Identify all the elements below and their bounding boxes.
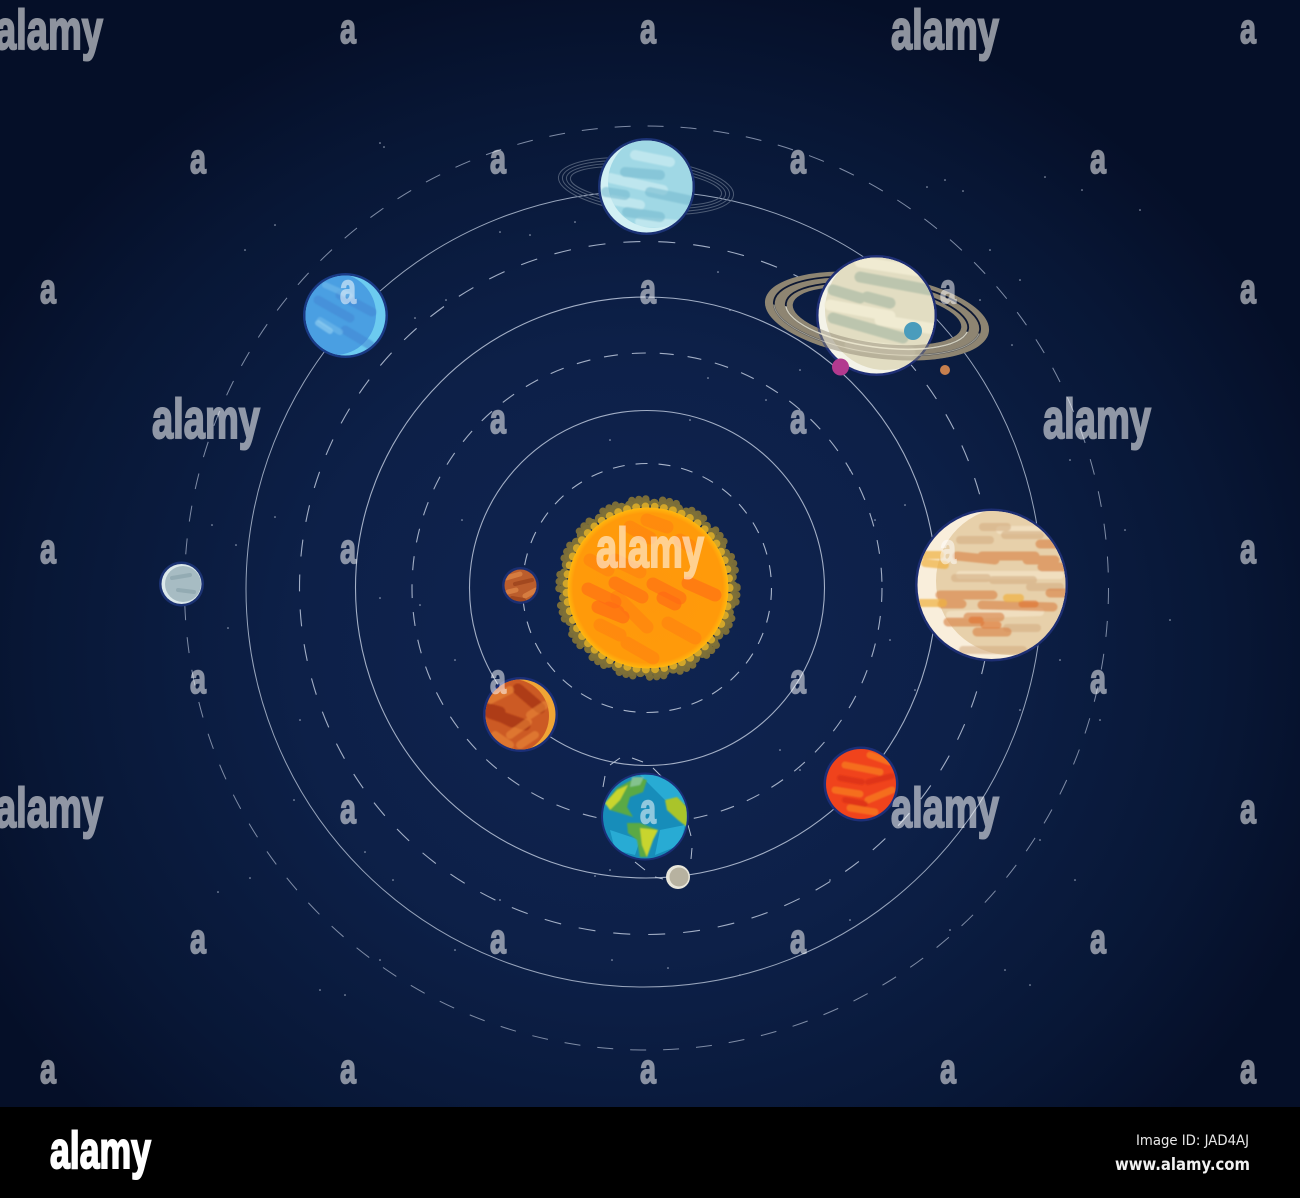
uranus	[556, 136, 736, 235]
website: www.alamy.com	[1115, 1155, 1250, 1174]
image id: Image ID: JAD4AJ	[1136, 1133, 1249, 1149]
stars	[212, 143, 1170, 995]
small watermarks: a	[190, 135, 206, 182]
small watermarks: a	[490, 135, 506, 182]
small watermarks: a	[490, 915, 506, 962]
venus	[483, 677, 558, 752]
orbits	[184, 126, 1108, 1050]
orbit 2 solid	[470, 410, 824, 766]
small watermarks: a	[40, 525, 56, 572]
small watermarks: a	[640, 1045, 656, 1092]
large watermarks: alamy	[1043, 387, 1151, 450]
earth moon orbit	[603, 758, 692, 879]
small watermarks: a	[640, 265, 656, 312]
pluto	[159, 562, 204, 606]
earth	[601, 772, 690, 860]
small watermarks: a	[40, 1045, 56, 1092]
sun streaks	[588, 520, 715, 658]
large watermarks: alamy	[152, 387, 260, 450]
neptune	[294, 273, 388, 358]
mars streaks	[835, 755, 892, 812]
pluto surface	[165, 566, 201, 602]
mars	[824, 746, 898, 822]
small watermarks: a	[340, 265, 356, 312]
orbit 6 solid	[246, 191, 1042, 987]
small watermarks: a	[940, 1045, 956, 1092]
small watermarks: a	[1240, 5, 1256, 52]
uranus rings	[556, 150, 736, 222]
saturn pink moon	[832, 358, 849, 376]
earth surface	[605, 775, 690, 857]
small watermarks: a	[1240, 785, 1256, 832]
small watermarks: a	[190, 655, 206, 702]
neptune bands	[306, 276, 377, 355]
small watermarks: a	[790, 655, 806, 702]
small watermarks: a	[940, 525, 956, 572]
small watermarks: a	[790, 135, 806, 182]
small watermarks: a	[340, 1045, 356, 1092]
small watermarks: a	[40, 265, 56, 312]
orbit 7 dashed	[184, 126, 1108, 1050]
saturn rings back	[759, 259, 995, 373]
saturn orange moon	[940, 365, 950, 375]
orbit 1 dashed	[522, 464, 772, 712]
small watermarks: a	[940, 265, 956, 312]
small watermarks: a	[1090, 655, 1106, 702]
orbit 5 dashed	[300, 242, 992, 934]
small watermarks: a	[790, 395, 806, 442]
small watermarks: a	[790, 915, 806, 962]
small watermarks: a	[340, 525, 356, 572]
mercury streaks	[506, 574, 536, 600]
footer bar	[0, 1107, 1300, 1198]
venus surface	[486, 680, 549, 750]
sun	[559, 499, 737, 677]
saturn rings front	[765, 304, 988, 360]
small watermarks: a	[1090, 135, 1106, 182]
mercury	[502, 567, 539, 604]
small watermarks: a	[1240, 265, 1256, 312]
saturn	[759, 250, 995, 376]
orbit 4 solid	[356, 297, 936, 878]
small watermarks: a	[490, 655, 506, 702]
sun corona	[559, 499, 737, 677]
saturn blue moon	[904, 322, 922, 340]
small watermarks: a	[640, 5, 656, 52]
footer logo: alamy	[50, 1122, 151, 1180]
jupiter bands	[918, 511, 1066, 655]
small watermarks: a	[1240, 525, 1256, 572]
large watermarks: alamy	[596, 516, 704, 579]
large watermarks: alamy	[891, 776, 999, 839]
small watermarks: a	[340, 785, 356, 832]
large watermarks	[0, 0, 1151, 839]
jupiter	[915, 508, 1068, 662]
saturn bands	[824, 258, 934, 370]
small watermarks: a	[490, 395, 506, 442]
small watermarks: a	[1090, 915, 1106, 962]
orbit 3 dashed	[412, 353, 882, 823]
small watermarks: a	[1240, 1045, 1256, 1092]
small watermarks: a	[190, 915, 206, 962]
uranus bands	[606, 136, 700, 228]
small watermarks: a	[640, 785, 656, 832]
earth moon	[666, 865, 690, 889]
small watermarks: a	[340, 5, 356, 52]
